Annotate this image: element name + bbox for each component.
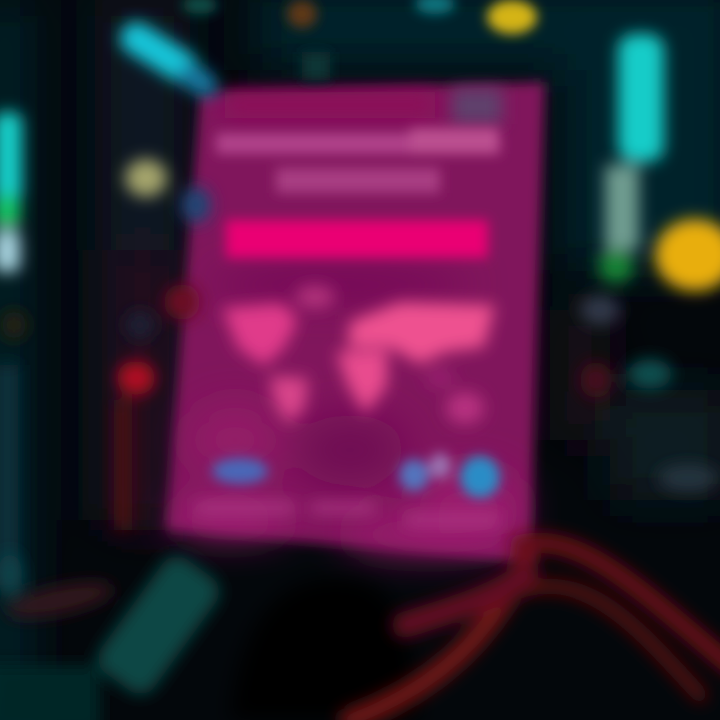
map: Asia islands — [426, 370, 454, 386]
poster panel — [166, 82, 545, 562]
map: Greenland — [295, 285, 335, 309]
world map — [222, 285, 495, 424]
map: North America — [222, 303, 298, 366]
blue stat markers — [212, 453, 500, 498]
poster tonal variation — [170, 273, 520, 553]
teal cable bottom left — [0, 549, 226, 720]
neon lights right — [580, 34, 720, 491]
map: Australia — [446, 392, 484, 424]
foreground dark hood — [230, 578, 420, 720]
red wires bottom right — [350, 543, 720, 720]
top lights — [182, 0, 537, 80]
neon lights left — [0, 112, 211, 585]
map: South America — [270, 376, 308, 424]
poster corner tag — [452, 88, 502, 124]
map: Africa — [336, 350, 387, 414]
neon tube top left — [114, 16, 224, 103]
poster title blur — [216, 128, 500, 193]
pink banner — [226, 220, 488, 258]
map: Eurasia — [348, 302, 495, 364]
lower poster text blur — [195, 503, 500, 525]
